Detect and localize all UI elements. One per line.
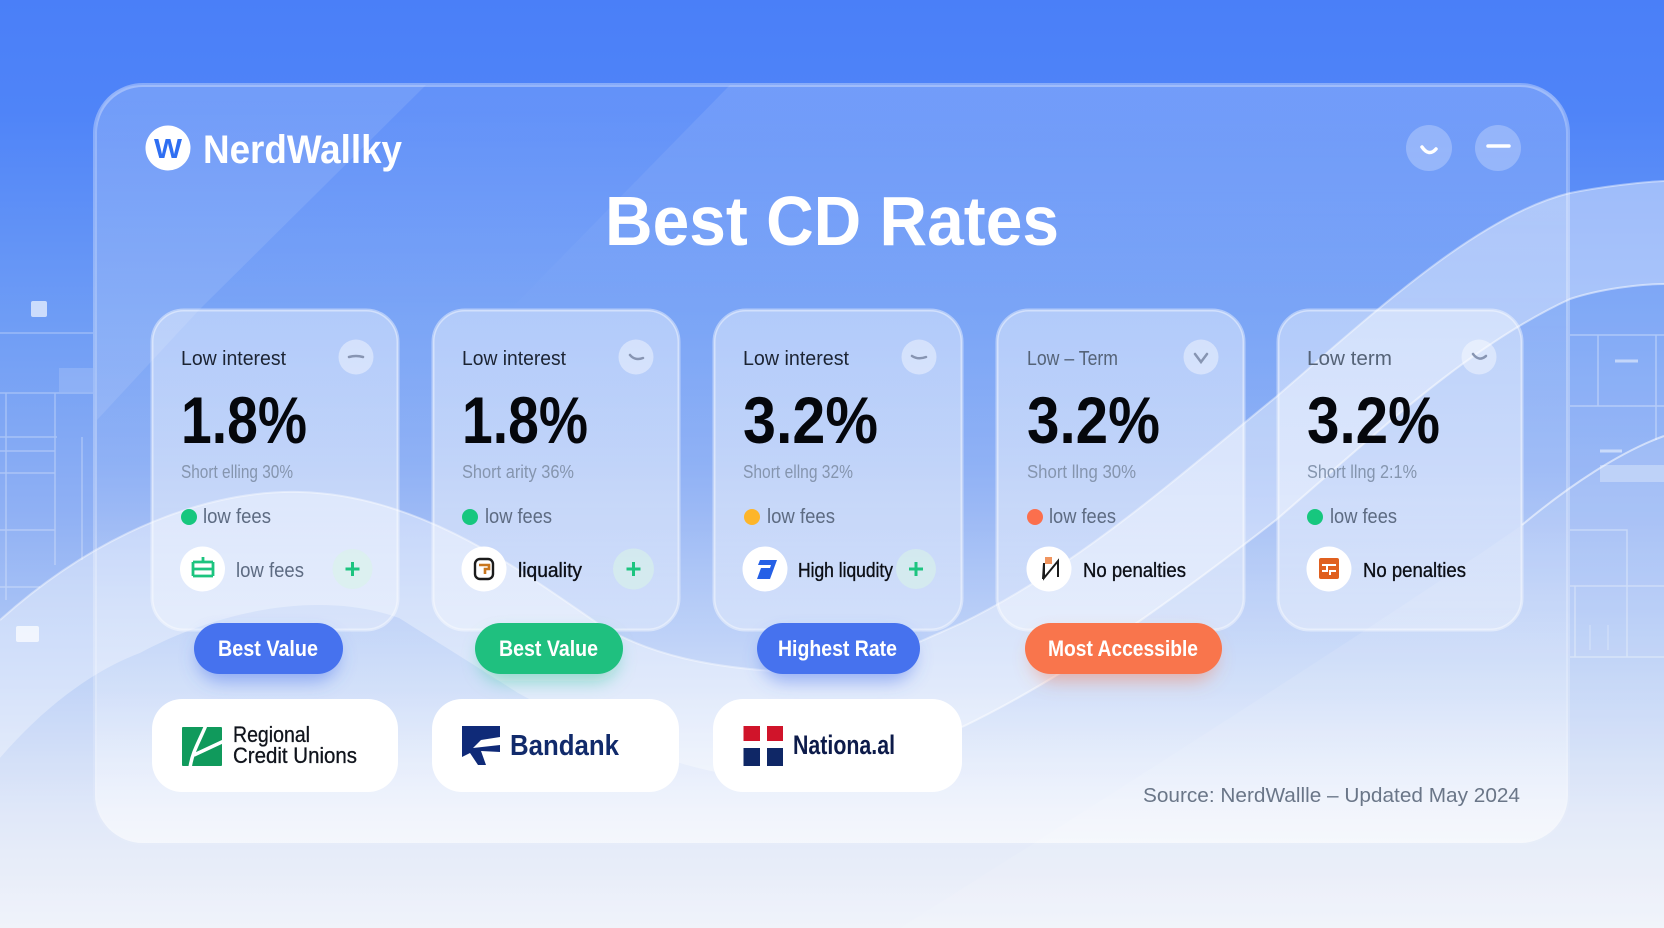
panel: card 2: liquality: [518, 560, 582, 582]
panel: card 4: [997, 310, 1244, 630]
panel: card 3: High liqudity: [798, 560, 893, 582]
logo: NerdWallky: W: [154, 133, 183, 164]
panel: card 3: [714, 310, 962, 630]
title: Best CD Rates: [605, 182, 1059, 260]
badge: Best Value green: Best Value: [499, 636, 598, 661]
panel: card 1: [152, 310, 398, 630]
panel: card 4: Low – Term: [1027, 348, 1118, 370]
window controls: [1406, 125, 1521, 171]
icon: wallet square: [475, 559, 493, 579]
panel: card 3: Short ellng 32%: [743, 462, 853, 482]
panel: card 5: [1278, 310, 1522, 630]
logo card: National: [713, 699, 962, 792]
logo card: Regional Credit Unions: Credit Unions: [233, 743, 357, 768]
badge: Highest Rate: [757, 623, 920, 681]
panel: card 4: 3.2%: [1027, 383, 1160, 457]
logo card: National: Nationa.al: [793, 730, 895, 760]
icon: navy flag: [462, 726, 500, 765]
logo: NerdWallky: [146, 126, 403, 172]
logo card: Regional Credit Unions: Regional: [233, 722, 310, 747]
panel: card 5: Low term: [1307, 348, 1392, 370]
icon: green leaf: [182, 725, 224, 768]
panel: card 4: low fees: [1049, 506, 1116, 528]
panel: card 1: Short elling 30%: [181, 462, 293, 482]
badge: Most Accessible: Most Accessible: [1048, 636, 1198, 661]
icon: blue arrow mark: [757, 560, 777, 579]
panel: card 2: Low interest: [462, 348, 566, 370]
panel: main glass card: [95, 85, 1568, 843]
panel: card 2: [433, 310, 679, 630]
badge: Highest Rate: Highest Rate: [778, 636, 897, 661]
icon: green list: [193, 557, 213, 576]
icon: black N mark: [1043, 557, 1058, 579]
panel: card 3: Low interest: [743, 348, 849, 370]
badge: Best Value green: [475, 623, 623, 681]
source note: Source: NerdWallle – Updated May 2024: [1143, 784, 1520, 807]
panel: card 1: 1.8%: [181, 383, 307, 457]
badge: Best Value blue: Best Value: [218, 636, 318, 661]
background grid left: [0, 301, 93, 600]
panel: card 5: Short llng 2:1%: [1307, 462, 1417, 482]
badge: Best Value blue: [194, 623, 343, 681]
logo: NerdWallky: NerdWallky: [203, 128, 403, 172]
icon: red and navy squares: [744, 726, 783, 766]
logo card: Regional Credit Unions: [152, 699, 398, 792]
logo card: Bandank: [432, 699, 679, 792]
background grid right: [1570, 335, 1664, 657]
panel: card 2: Short arity 36%: [462, 462, 574, 482]
panel: card 3: 3.2%: [743, 383, 878, 457]
badge: Most Accessible: [1025, 623, 1222, 681]
panel: card 1: low fees: [203, 506, 271, 528]
panel: card 1: Low interest: [181, 348, 286, 370]
panel: card 5: low fees: [1330, 506, 1397, 528]
panel: card 2: 1.8%: [462, 383, 588, 457]
panel: card 3: low fees: [767, 506, 835, 528]
logo card: Bandank: Bandank: [510, 730, 620, 762]
panel: card 4: No penalties: [1083, 560, 1186, 582]
panel: card 5: 3.2%: [1307, 383, 1440, 457]
icon: orange square: [1319, 558, 1339, 579]
panel: card 2: low fees: [485, 506, 552, 528]
panel: card 5: No penalties: [1363, 560, 1466, 582]
panel: card 1: low fees: [236, 560, 304, 582]
panel: card 4: Short llng 30%: [1027, 462, 1136, 482]
